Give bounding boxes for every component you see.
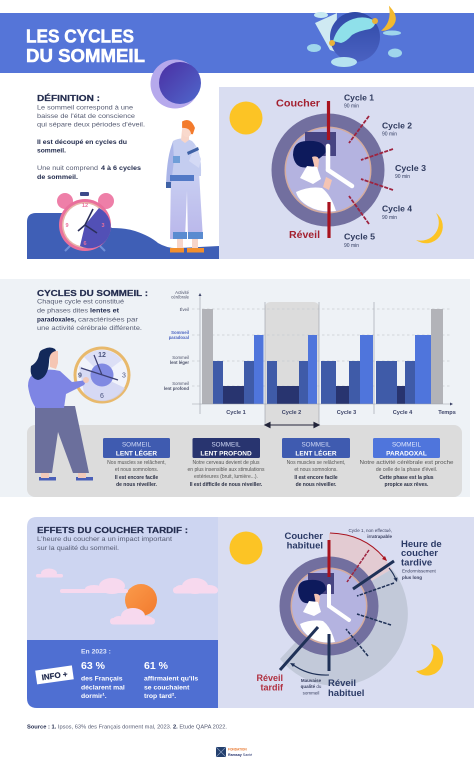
chart: cerebral activity: Cycle 4 bbox=[393, 410, 413, 416]
arrows bbox=[330, 533, 385, 559]
heading and text: cycles: caractérisées par bbox=[78, 316, 139, 324]
stat: 61 %: trop tard². bbox=[144, 693, 176, 700]
panel: night clock diagram bbox=[219, 87, 474, 259]
phase card: lent profond: extérieures (bruit, lumière...). bbox=[194, 474, 258, 480]
chart: cerebral activity: Cycle 2 bbox=[282, 410, 301, 416]
phase card: lent profond: LENT PROFOND bbox=[200, 450, 252, 458]
phase card: paradoxal bbox=[360, 438, 454, 488]
axis labels: Activité bbox=[175, 290, 190, 295]
stat: 61 %: affirmaient qu'ils bbox=[144, 676, 198, 682]
label: heure de coucher tardive: Heure de bbox=[401, 539, 442, 550]
phase card: paradoxal: Cette phase est la plus bbox=[379, 475, 434, 481]
phase card: lent profond: SOMMEIL bbox=[211, 442, 241, 448]
icon: alarm clock: 9 bbox=[65, 223, 69, 229]
panel: definition text: baisse de l'état de conscience bbox=[37, 113, 136, 120]
phase card: lent léger 2: SOMMEIL bbox=[301, 442, 331, 448]
badge: info + bbox=[35, 665, 74, 684]
axis labels: lent profond bbox=[164, 386, 189, 391]
axis labels: Sommeil bbox=[172, 355, 189, 360]
stat: 61 %: 61 % bbox=[144, 660, 169, 672]
label: cycle non effectué: Cycle 1, non effectué, bbox=[349, 528, 392, 533]
stat: 63 %: des Français bbox=[81, 676, 123, 682]
label: mauvaise qualité: qualité du bbox=[301, 684, 322, 689]
icon: man in pyjamas bbox=[166, 121, 204, 252]
label: endormissement: plus long bbox=[402, 575, 422, 580]
cycle labels: Cycle 1 bbox=[344, 94, 375, 102]
stat: 63 %: déclarent mal bbox=[81, 684, 125, 692]
icon: alarm clock: 12 bbox=[82, 203, 88, 209]
phase card: paradoxal: de celle de la phase d'éveil. bbox=[376, 467, 437, 473]
label: réveil habituel bbox=[328, 678, 364, 699]
label: réveil tardif: Réveil bbox=[256, 673, 283, 683]
heading and text: cycles bbox=[37, 288, 148, 332]
badge: info +: INFO + bbox=[41, 670, 68, 682]
label: cycle non effectué: irratrapable bbox=[367, 534, 392, 539]
double arrow bbox=[265, 422, 319, 428]
cycle labels: Cycle 3 bbox=[395, 164, 427, 173]
cycle labels: 90 min bbox=[344, 104, 359, 110]
label: réveil tardif bbox=[256, 673, 284, 692]
phase card: lent léger 1: et nous somnolons. bbox=[115, 467, 158, 473]
title bbox=[26, 26, 145, 66]
phase card: lent léger 1: Il est encore facile bbox=[115, 475, 158, 481]
panel: definition text: DÉFINITION : bbox=[37, 93, 100, 103]
stat: 63 %: En 2023 : bbox=[81, 648, 111, 656]
illustration: woman and clock: 6 bbox=[100, 393, 104, 400]
phase card: lent profond bbox=[188, 438, 265, 488]
phase card: lent léger 1: de nous réveiller. bbox=[116, 482, 158, 488]
stat: 61 %: se couchaient bbox=[144, 684, 190, 692]
title: DU SOMMEIL bbox=[26, 45, 145, 66]
illustration: woman and clock bbox=[28, 346, 130, 480]
phase card: paradoxal: PARADOXAL bbox=[386, 450, 427, 458]
label: endormissement bbox=[402, 568, 437, 580]
heading and text: cycles: une activité cérébrale différente. bbox=[37, 325, 142, 332]
panel: definition text: Le sommeil correspond à une bbox=[37, 104, 134, 112]
panel: definition text: sommeil. bbox=[37, 148, 66, 154]
axis labels: Sommeil bbox=[172, 381, 189, 386]
panel: definition text bbox=[37, 93, 145, 181]
missed cycle wedge bbox=[329, 533, 392, 606]
phase card: paradoxal: Notre activité cérébrale est proche bbox=[360, 460, 454, 466]
bedtime lines bbox=[328, 540, 330, 577]
heading and text: cycles: lentes et bbox=[90, 308, 120, 314]
axis labels: Sommeil bbox=[171, 330, 189, 335]
chart: cerebral activity: Cycle 1 bbox=[226, 410, 246, 416]
axis labels: lent léger bbox=[170, 360, 189, 365]
chart: cerebral activity bbox=[164, 290, 456, 428]
illustration: woman and clock: 9 bbox=[78, 372, 82, 380]
phase card: lent léger 1: LENT LÉGER bbox=[116, 448, 157, 458]
phase card: lent léger 2 bbox=[282, 438, 350, 488]
panel: definition text: 4 à 6 cycles bbox=[101, 165, 142, 172]
label: heure de coucher tardive: coucher bbox=[401, 548, 438, 559]
panel: late bedtime clock bbox=[218, 517, 474, 708]
icon: sun bbox=[230, 532, 262, 564]
phase card: lent léger 1: SOMMEIL bbox=[122, 442, 152, 448]
logo: FONDATION bbox=[228, 748, 247, 752]
cycle labels: 90 min bbox=[344, 243, 359, 249]
label: réveil tardif: tardif bbox=[260, 682, 284, 692]
label: mauvaise qualité: sommeil bbox=[303, 690, 319, 696]
cycle labels: 90 min bbox=[382, 215, 397, 221]
logo bbox=[216, 747, 252, 757]
phase card: lent léger 2: de nous réveiller. bbox=[296, 482, 337, 488]
label: coucher: Coucher bbox=[276, 98, 320, 110]
phase card: lent léger 2: et nous somnolons. bbox=[294, 467, 338, 473]
cycle 2 highlight bbox=[265, 302, 319, 425]
cycle labels: Cycle 4 bbox=[382, 204, 413, 214]
label: coucher habituel: Coucher bbox=[284, 531, 323, 542]
phase card: paradoxal: propice aux rêves. bbox=[385, 482, 429, 488]
panel: sleep cycles background bbox=[0, 279, 470, 497]
icon: crescent moon bbox=[416, 644, 443, 676]
phase card: lent léger 2: Il est encore facile bbox=[294, 475, 338, 481]
label: endormissement: Endormissement bbox=[402, 568, 437, 574]
icon: crescent moon bbox=[416, 213, 443, 243]
phase card: paradoxal: SOMMEIL bbox=[392, 442, 422, 448]
heading and text: cycles: de phases dites bbox=[37, 308, 89, 314]
axis labels bbox=[164, 290, 190, 391]
panel: definition text: qui sépare deux périodes d'éveil. bbox=[37, 122, 145, 128]
icon: sleeping moon with mask bbox=[307, 8, 402, 67]
heading and text: cycles: CYCLES DU SOMMEIL : bbox=[37, 288, 148, 298]
label: heure de coucher tardive: tardive bbox=[401, 558, 432, 568]
clock with sleeper bbox=[280, 556, 378, 656]
label: coucher habituel: habituel bbox=[287, 540, 323, 552]
phase card: lent profond: en plus insensible aux stimulations bbox=[188, 467, 265, 473]
panel: definition text: Il est découpé en cycles du bbox=[37, 139, 127, 146]
icon: alarm clock: 3 bbox=[101, 223, 105, 229]
cycle labels: 90 min bbox=[395, 174, 410, 180]
phase card: lent léger 2: Nos muscles se relâchent, bbox=[287, 460, 345, 466]
chart: cerebral activity: Temps bbox=[438, 410, 456, 416]
phase card: lent léger 2: LENT LÉGER bbox=[295, 448, 337, 458]
icon: alarm clock bbox=[57, 192, 114, 251]
label: cycle non effectué bbox=[349, 528, 392, 539]
chart: cerebral activity: Cycle 3 bbox=[337, 410, 356, 416]
label: réveil habituel: Réveil bbox=[328, 678, 356, 689]
illustration: woman and clock: 12 bbox=[98, 352, 106, 359]
cycle labels: Cycle 2 bbox=[382, 122, 413, 130]
clock with sleeper bbox=[272, 114, 384, 226]
panel: definition text: Une nuit comprend bbox=[37, 165, 98, 172]
panel: definition text: de sommeil. bbox=[37, 174, 78, 181]
illustration: woman and clock: 3 bbox=[122, 372, 126, 380]
cycle boundaries bbox=[349, 116, 393, 224]
hill bbox=[27, 213, 219, 259]
label: coucher habituel bbox=[284, 531, 323, 552]
icon: sun bbox=[230, 102, 262, 134]
heading and text: cycles: Chaque cycle est constitué bbox=[37, 298, 124, 306]
stat: 61 % bbox=[144, 660, 198, 700]
axis labels: paradoxal bbox=[169, 335, 189, 340]
axis labels: Éveil bbox=[180, 307, 189, 312]
source: Source : 1. Ipsos, 63% des Français dorment mal, 2023. 2. Etude QAPA 2022. bbox=[27, 724, 227, 730]
heading and text: cycles: paradoxales, bbox=[37, 316, 76, 324]
icon: alarm clock: 6 bbox=[83, 241, 87, 247]
stat: 63 %: dormir¹. bbox=[81, 693, 107, 700]
shifted sleep wedge bbox=[280, 569, 408, 686]
intro text bbox=[37, 536, 172, 552]
intro text: sur la qualité du sommeil. bbox=[37, 545, 119, 552]
bedtime and wake-up markers bbox=[327, 101, 331, 238]
panel: late bedtime effects left bbox=[27, 517, 218, 640]
stat: 63 %: 63 % bbox=[81, 660, 106, 672]
label: mauvaise qualité: Mauvaise bbox=[301, 678, 322, 683]
intro text: L'heure du coucher a un impact important bbox=[37, 536, 172, 543]
cycle labels bbox=[344, 94, 427, 249]
cycle labels: 90 min bbox=[382, 132, 397, 138]
illustration: sunset and clouds bbox=[36, 568, 218, 624]
stat: 63 % bbox=[81, 648, 125, 700]
phase card: lent léger 1 bbox=[103, 438, 170, 488]
panel: phases background bbox=[27, 425, 462, 497]
phase card: lent léger 1: Nos muscles se relâchent, bbox=[107, 460, 166, 466]
panel: info stats bbox=[27, 640, 218, 708]
icon: large purple moon bbox=[150, 60, 201, 108]
phase card: lent profond: Il est difficile de nous réveiller. bbox=[190, 482, 263, 488]
phase card: lent profond: Notre cerveau devient de plus bbox=[192, 460, 260, 466]
label: mauvaise qualité bbox=[301, 678, 322, 696]
label: réveil: Réveil bbox=[289, 230, 320, 241]
header band bbox=[0, 13, 474, 73]
axis labels: cérébrale bbox=[171, 294, 190, 300]
cycle boundaries bbox=[347, 550, 369, 582]
heading: effets: EFFETS DU COUCHER TARDIF : bbox=[37, 525, 188, 535]
label: réveil habituel: habituel bbox=[328, 688, 364, 699]
logo: Ramsay Santé bbox=[228, 753, 252, 757]
title: LES CYCLES bbox=[26, 26, 134, 46]
cycle labels: Cycle 5 bbox=[344, 232, 376, 242]
label: heure de coucher tardive bbox=[401, 539, 442, 568]
